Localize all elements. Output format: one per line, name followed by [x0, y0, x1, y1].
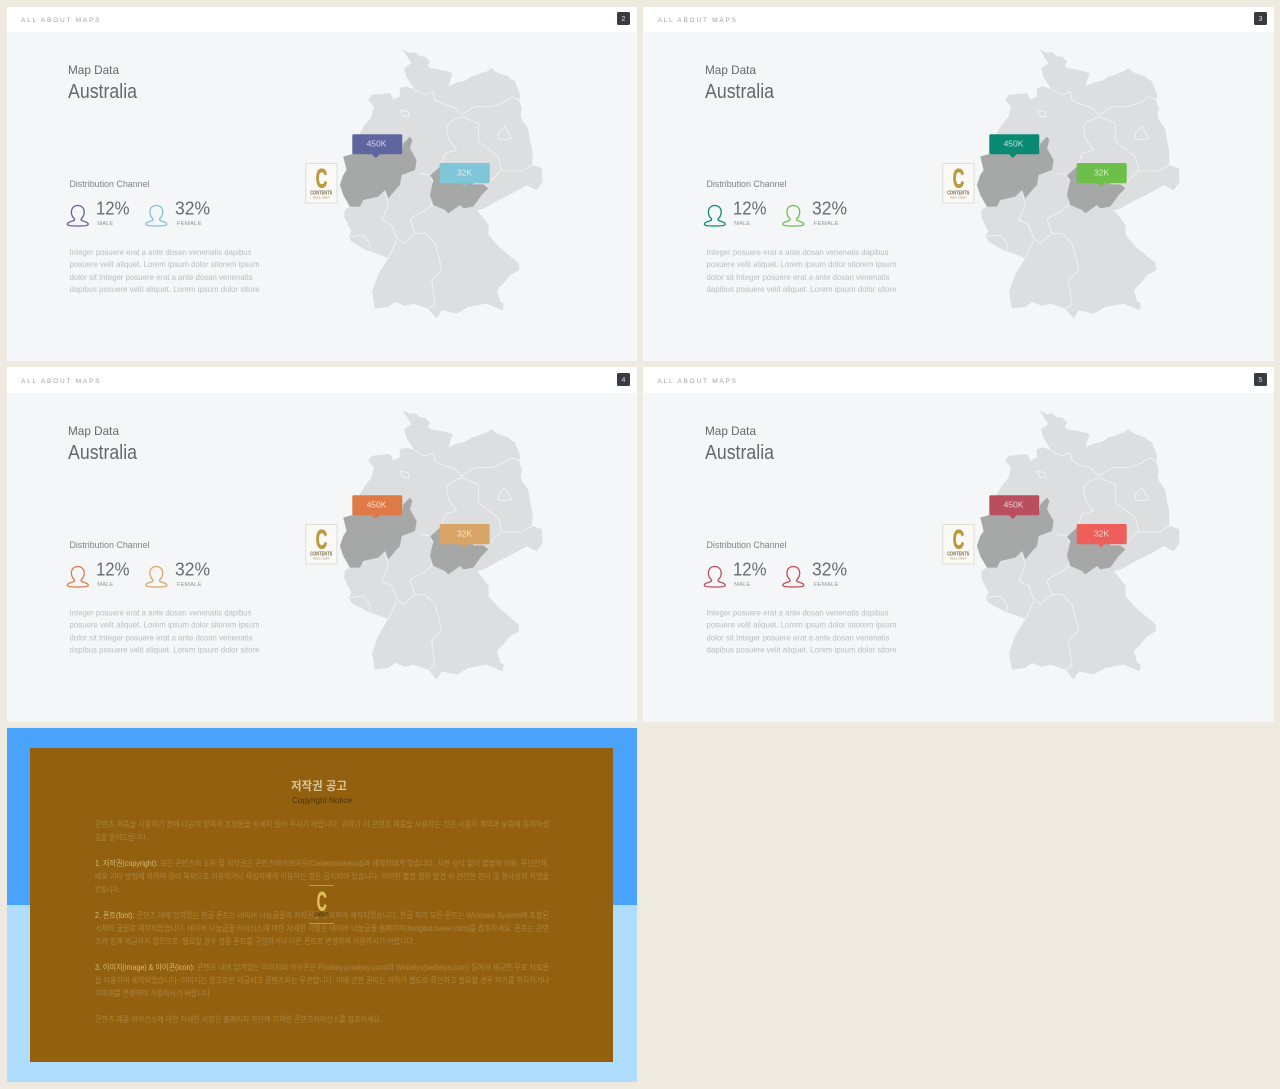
stat: male: 12%	[96, 198, 130, 218]
body text: dolor sit Integer posuere erat a ante dosan venenatis	[70, 632, 252, 642]
heading: Australia	[68, 80, 138, 103]
body text	[706, 247, 897, 294]
notice body text: 1. 저작권(copyright): 모든 콘텐츠의 소유 및 저작권은 콘텐츠테이크아웃(Contentstakeout)과 제작자에게 있습니다. 사전 승낙 없이 불법적 이용, 무단전제,	[95, 858, 549, 868]
icon: female person	[783, 566, 804, 587]
stat: female: 32%	[812, 560, 847, 580]
panel: copyright notice	[7, 728, 637, 1082]
stat: male: MALE	[97, 582, 114, 588]
body text: dapibus posuere velit aliquet. Lorem ipsum dolor sitore	[706, 644, 897, 654]
callout: 450K: 450K	[1004, 138, 1024, 148]
page number badge: 3	[1259, 16, 1263, 23]
body text: dapibus posuere velit aliquet. Lorem ipsum dolor sitore	[70, 284, 260, 294]
logo watermark: CONTENTS	[314, 912, 329, 918]
logo: REAL DEEP	[950, 196, 967, 200]
page number badge: 5	[1259, 377, 1263, 384]
page number badge	[617, 373, 630, 386]
logo	[943, 164, 974, 203]
stat: male: 12%	[96, 560, 130, 580]
page number badge	[1254, 12, 1267, 25]
stat: male: MALE	[97, 221, 114, 227]
icon: female person	[783, 206, 804, 226]
stat: female: FEMALE	[814, 582, 839, 588]
body text: posuere velit aliquet. Lorem ipsum dolor sitorem ipsum	[70, 259, 260, 269]
stat: female	[812, 560, 847, 588]
stat: male	[733, 198, 766, 227]
stat: male	[733, 560, 766, 588]
notice title: 저작권 공고	[291, 778, 347, 793]
heading	[68, 424, 138, 464]
body text: dolor sit Integer posuere erat a ante dosan venenatis	[706, 632, 890, 642]
callout: 450K	[989, 495, 1039, 519]
map of Germany	[977, 411, 1179, 679]
stat: female: FEMALE	[814, 221, 839, 227]
header label: ALL ABOUT MAPS	[658, 17, 737, 24]
logo: C	[953, 164, 964, 194]
icon: male person	[704, 566, 725, 587]
body text: Integer posuere erat a ante dosan venenatis dapibus	[70, 247, 252, 257]
body text: dapibus posuere velit aliquet. Lorem ipsum dolor sitore	[706, 284, 897, 294]
header label: ALL ABOUT MAPS	[21, 17, 100, 24]
callout: 32K: 32K	[1094, 528, 1109, 538]
map of Germany	[977, 50, 1179, 318]
logo	[306, 524, 337, 564]
subheading: Distribution Channel	[706, 179, 786, 189]
logo: C	[316, 524, 327, 554]
callout: 32K: 32K	[457, 168, 472, 178]
logo: C	[316, 164, 327, 194]
notice body text: 이미지를 변경하여 사용하시기 바랍니다.	[95, 988, 212, 998]
stat: male	[96, 560, 130, 588]
notice body text: 3. 이미지(image) & 아이콘(icon): 콘텐츠 내에 담겨있는 이미지와 아이콘은 Pixabay(pixabay.com)와 Webalys(webalys.com) 등에서 제공한 무료 자료들	[95, 962, 549, 972]
callout: 450K	[989, 134, 1039, 158]
notice title: Copyright Notice	[292, 796, 353, 805]
page number badge: 2	[622, 16, 626, 23]
icon: female person	[146, 206, 167, 226]
callout: 450K: 450K	[367, 138, 387, 148]
callout: 450K	[352, 495, 402, 519]
body text	[70, 247, 260, 294]
notice body text: 서체와 글꼴로 제작되었습니다. 네이버 나눔글꼴 라이선스에 대한 자세한 사항은 네이버 나눔글꼴 홈페이지(hangeul.naver.com)를 참조하세요. 폰트는 콘텐	[95, 923, 549, 933]
map of Germany	[340, 50, 542, 318]
panel: slide 5	[643, 367, 1274, 722]
notice body text: 배포 기타 방법에 의하여 영리 목적으로 이용하거나 제삼자에게 이용하는 것은 금지되어 있습니다. 이러한 불법 행위 발견 시 관련한 민사 및 형사상의 처벌을	[95, 871, 549, 881]
panel: slide 2	[7, 7, 637, 361]
page number badge	[1254, 373, 1267, 386]
heading: Map Data	[705, 424, 756, 438]
body text: Integer posuere erat a ante dosan venenatis dapibus	[706, 247, 888, 257]
header label: ALL ABOUT MAPS	[658, 378, 737, 385]
body text: posuere velit aliquet. Lorem ipsum dolor sitorem ipsum	[706, 620, 896, 630]
icon: male person	[67, 206, 88, 226]
heading	[68, 63, 138, 103]
heading	[705, 63, 775, 103]
logo	[306, 164, 337, 203]
subheading: Distribution Channel	[70, 179, 150, 189]
notice body text: 츠와 함께 제공되지 않으므로, 필요할 경우 정품 폰트를 구입하거나 다른 폰트로 변경하여 사용하시기 바랍니다.	[95, 936, 415, 946]
notice body text	[95, 819, 550, 1024]
header label: ALL ABOUT MAPS	[21, 378, 100, 385]
stat: male: 12%	[733, 560, 766, 580]
logo	[943, 524, 974, 564]
callout: 32K: 32K	[457, 528, 472, 538]
logo: REAL DEEP	[950, 556, 967, 560]
icon: male person	[67, 566, 88, 587]
subheading: Distribution Channel	[70, 540, 150, 550]
body text: dolor sit Integer posuere erat a ante dosan venenatis	[706, 272, 890, 282]
stat: female: 32%	[175, 560, 210, 580]
callout: 450K	[352, 134, 402, 158]
callout: 32K	[440, 524, 490, 548]
stat: female: 32%	[175, 198, 210, 218]
logo: REAL DEEP	[313, 556, 330, 560]
logo watermark	[309, 885, 334, 924]
notice body text: 을 이용하여 제작되었습니다. 이미지는 참고로만 제공되고 콘텐츠와는 무관합니다. 이에 관한 권리는 귀하가 별도로 확인하고 필요할 경우 허가를 취득하거나	[95, 975, 550, 985]
body text: Integer posuere erat a ante dosan venenatis dapibus	[70, 608, 252, 618]
notice body text: 콘텐츠 제품을 사용하기 전에 다음의 항목과 조항들을 자세히 읽어 주시기 바랍니다. 귀하가 이 콘텐츠 제품을 사용하는 것은 사용자 계약과 보증에 동의하셨	[95, 819, 550, 829]
heading: Australia	[68, 441, 138, 464]
callout: 450K: 450K	[367, 500, 387, 510]
notice title	[291, 778, 353, 805]
heading: Australia	[705, 441, 775, 464]
stat: female	[175, 198, 210, 227]
callout: 32K: 32K	[1094, 168, 1109, 178]
stat: female: FEMALE	[177, 221, 202, 227]
callout: 32K	[440, 163, 490, 187]
stat: male: MALE	[734, 582, 751, 588]
heading	[705, 424, 775, 464]
logo: CONTENTS	[310, 552, 333, 558]
subheading: Distribution Channel	[706, 540, 786, 550]
heading: Map Data	[68, 63, 119, 77]
logo: CONTENTS	[310, 190, 333, 196]
notice body text: 2. 폰트(font): 콘텐츠 내에 담겨있는 한글 폰트는 네이버 나눔글꼴의 저작권을 동의하여 제작되었습니다. 한글 외의 모든 폰트는 Windows System에 포함된	[95, 910, 549, 920]
notice body text: 콘텐츠 제품 라이선스에 대한 자세한 사항은 홈페이지 하단에 기재한 콘텐츠라이선스를 참조하세요.	[95, 1014, 382, 1024]
stat: female: FEMALE	[177, 582, 202, 588]
callout: 32K	[1077, 163, 1127, 187]
page number badge	[617, 12, 630, 25]
logo: CONTENTS	[947, 552, 970, 558]
logo watermark: C	[317, 886, 327, 916]
body text: dapibus posuere velit aliquet. Lorem ipsum dolor sitore	[70, 644, 260, 654]
body text	[70, 608, 260, 654]
icon: female person	[146, 566, 167, 587]
body text: Integer posuere erat a ante dosan venenatis dapibus	[706, 608, 888, 618]
body text: posuere velit aliquet. Lorem ipsum dolor sitorem ipsum	[70, 620, 260, 630]
body text: dolor sit Integer posuere erat a ante dosan venenatis	[70, 272, 252, 282]
panel: slide 4	[7, 367, 637, 722]
stat: male	[96, 198, 130, 227]
stat: female	[812, 198, 847, 227]
logo: C	[953, 524, 964, 554]
callout: 450K: 450K	[1004, 500, 1024, 510]
icon: male person	[704, 206, 725, 226]
stat: female: 32%	[812, 198, 847, 218]
notice body text: 받습니다.	[95, 884, 120, 894]
page number badge: 4	[622, 377, 626, 384]
logo: CONTENTS	[947, 190, 970, 196]
body text: posuere velit aliquet. Lorem ipsum dolor sitorem ipsum	[706, 259, 896, 269]
heading: Australia	[705, 80, 775, 103]
notice body text: 음을 알려드립니다.	[95, 832, 148, 842]
stat: male: MALE	[734, 221, 751, 227]
heading: Map Data	[705, 63, 756, 77]
callout: 32K	[1077, 524, 1127, 548]
map of Germany	[340, 411, 542, 679]
stat: male: 12%	[733, 198, 766, 218]
body text	[706, 608, 897, 654]
stat: female	[175, 560, 210, 588]
panel: slide 3	[643, 7, 1274, 361]
heading: Map Data	[68, 424, 119, 438]
logo: REAL DEEP	[313, 196, 330, 200]
